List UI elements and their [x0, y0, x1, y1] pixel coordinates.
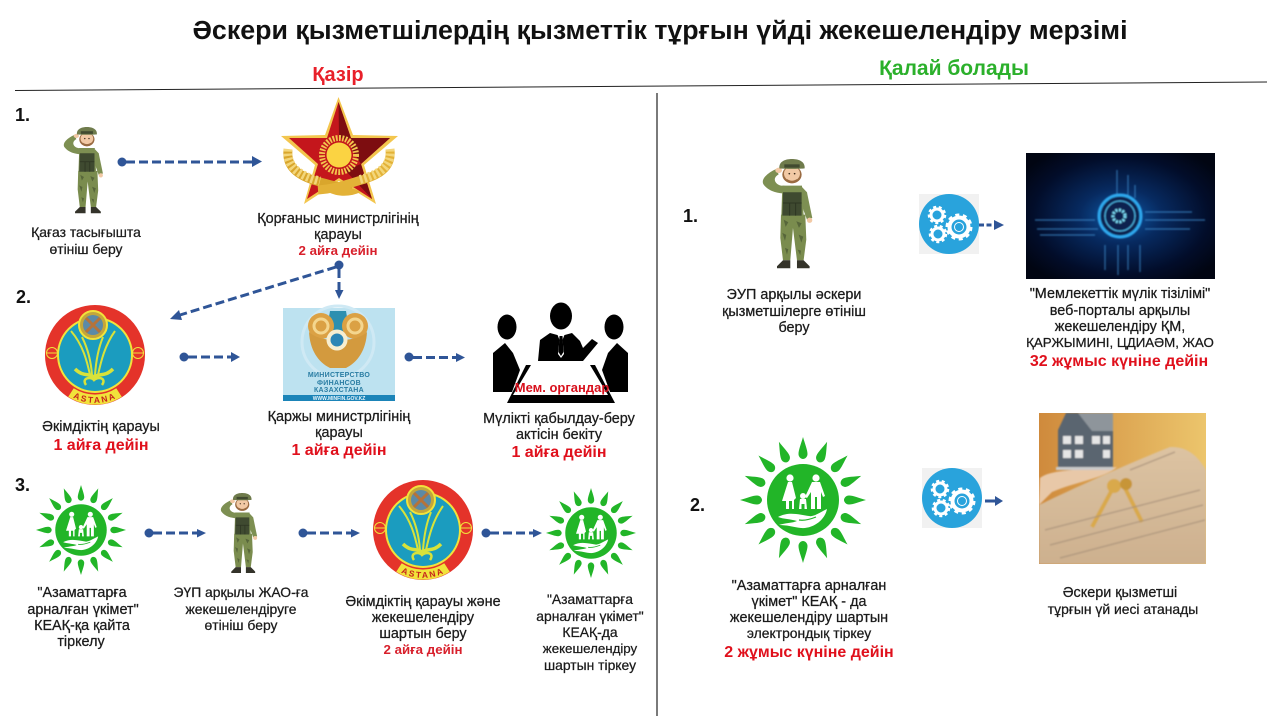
icon: defence ministry star — [281, 97, 398, 204]
icon: finance ministry logo — [283, 306, 395, 402]
label: state property register: жекешелендіру ҚМ, — [1055, 319, 1185, 335]
label: application via e-service — [173, 584, 309, 633]
label: akimat review — [42, 419, 160, 454]
icon: finance ministry logo: МИНИСТЕРСТВО — [308, 372, 370, 379]
label: electronic registration: электрондық тіркеу — [747, 625, 871, 641]
label: contract registration: КЕАҚ-да — [562, 624, 618, 640]
label: defence ministry review — [257, 211, 419, 258]
label: state property register: 32 жұмыс күніне дейін — [1030, 353, 1208, 370]
label: re-registration: тіркелу — [57, 634, 105, 650]
label: akimat review and contract — [345, 594, 501, 657]
title: Әскери қызметшілердің қызметтік тұрғын үйді жекешелендіру мерзімі — [192, 17, 1128, 45]
icon: citizens government logo, large — [740, 437, 866, 563]
icon: soldier, step 3 — [221, 493, 257, 573]
label: re-registration — [27, 585, 139, 650]
image: house and keys — [1039, 413, 1206, 564]
label: state property register: ҚАРЖЫМИНІ, ЦДИАӘМ, ЖАО — [1026, 335, 1214, 350]
label: state property register — [1026, 286, 1214, 370]
label: application via e-service: өтініш беру — [205, 617, 278, 633]
label: contract registration: арналған үкімет" — [536, 608, 644, 624]
label: electronic registration: "Азаматтарға арналған — [732, 578, 886, 594]
image: digital portal — [1026, 153, 1215, 279]
label: acceptance act: актісін бекіту — [516, 427, 603, 443]
step number 1: 1. — [15, 105, 30, 125]
label: becomes owner — [1048, 585, 1198, 617]
label: e-service application: беру — [778, 320, 810, 336]
step number 1: 1. — [683, 206, 698, 226]
arrow: akimat to logo — [482, 528, 542, 538]
label: defence ministry review: 2 айға дейін — [298, 243, 378, 258]
icon: finance ministry logo: WWW.MINFIN.GOV.KZ — [313, 396, 365, 402]
label: becomes owner: Әскери қызметші — [1063, 585, 1177, 601]
label: re-registration: арналған үкімет" — [27, 602, 139, 618]
label: finance ministry review: 1 айға дейін — [291, 442, 387, 459]
arrows: defence ministry to akimat and finance ministry — [170, 260, 344, 320]
label: e-service application — [722, 287, 866, 336]
heading: how it will be: Қалай болады — [879, 57, 1029, 80]
label: state property register: веб-порталы арқылы — [1050, 303, 1190, 319]
panel: future process — [683, 153, 1215, 661]
icon: meeting of state bodies — [493, 302, 628, 403]
arrow: finance ministry to state bodies — [404, 352, 465, 362]
label: paper application: өтініш беру — [50, 241, 123, 257]
icon: gears with arrow — [919, 194, 1004, 254]
icon: citizens government logo, step 3 start — [36, 485, 126, 575]
label: acceptance act: Мүлікті қабылдау-беру — [483, 411, 636, 427]
label: defence ministry review: Қорғаныс министрлігінің — [257, 211, 419, 227]
icon: Astana emblem, step 3: ASTANA — [401, 568, 444, 578]
label: akimat review and contract: 2 айға дейін — [383, 642, 463, 657]
label: finance ministry review: Қаржы министрлігінің — [268, 409, 410, 425]
label: re-registration: КЕАҚ-қа қайта — [34, 618, 130, 634]
label: akimat review and contract: Әкімдіктің қарауы және — [345, 594, 501, 610]
label: akimat review and contract: шартын беру — [379, 626, 467, 642]
icon: soldier, large — [763, 159, 812, 268]
heading: now: Қазір — [312, 64, 364, 86]
panel: current process — [15, 97, 644, 674]
label: finance ministry review — [268, 409, 410, 459]
label: re-registration: "Азаматтарға — [37, 585, 127, 601]
label: becomes owner: тұрғын үй иесі атанады — [1048, 601, 1198, 617]
icon: Astana emblem — [45, 305, 145, 405]
icon: finance ministry logo: КАЗАХСТАНА — [314, 387, 364, 394]
label: finance ministry review: қарауы — [315, 425, 363, 441]
label: e-service application: қызметшілерге өтініш — [722, 304, 866, 320]
icon: citizens government logo, step 3 end — [546, 488, 636, 578]
label: acceptance act — [483, 411, 636, 461]
icon: soldier, paper application — [64, 127, 103, 213]
label: contract registration: жекешелендіру — [543, 641, 638, 656]
step number 2: 2. — [16, 287, 31, 307]
label: application via e-service: жекешелендіруге — [185, 601, 297, 617]
step number 2: 2. — [690, 495, 705, 515]
label: contract registration: шартын тіркеу — [544, 657, 636, 673]
label: acceptance act: 1 айға дейін — [511, 444, 607, 461]
arrow: logo to soldier — [144, 528, 206, 538]
icon: Astana emblem, step 3 — [373, 480, 473, 580]
label: defence ministry review: қарауы — [314, 227, 362, 243]
label: contract registration — [536, 591, 644, 673]
label: e-service application: ЭУП арқылы әскери — [727, 287, 861, 303]
label: paper application: Қағаз тасығышта — [31, 224, 141, 240]
step number 3: 3. — [15, 475, 30, 495]
arrow: soldier to defence ministry — [118, 156, 262, 167]
label: application via e-service: ЭҮП арқылы ЖАО-ға — [173, 584, 309, 600]
label: electronic registration — [724, 578, 894, 661]
label: electronic registration: үкімет" КЕАҚ - да — [752, 594, 866, 610]
arrow: soldier to akimat — [298, 528, 360, 538]
icon: meeting of state bodies: Мем. органдар — [515, 380, 609, 395]
label: contract registration: "Азаматтарға — [547, 591, 633, 607]
icon: gears with arrow, second — [922, 468, 1003, 528]
label: paper application — [31, 224, 141, 257]
label: electronic registration: 2 жұмыс күніне дейін — [724, 644, 894, 661]
icon: finance ministry logo: ФИНАНСОВ — [317, 380, 361, 387]
label: akimat review: Әкімдіктің қарауы — [42, 419, 160, 435]
arrow: akimat to finance ministry — [180, 352, 240, 362]
label: akimat review: 1 айға дейін — [53, 437, 149, 454]
icon: Astana emblem: ASTANA — [73, 393, 116, 404]
label: state property register: "Мемлекеттік мүлік тізілімі" — [1030, 286, 1210, 302]
label: electronic registration: жекешелендіру шартын — [730, 610, 888, 626]
label: akimat review and contract: жекешелендіру — [372, 610, 475, 626]
